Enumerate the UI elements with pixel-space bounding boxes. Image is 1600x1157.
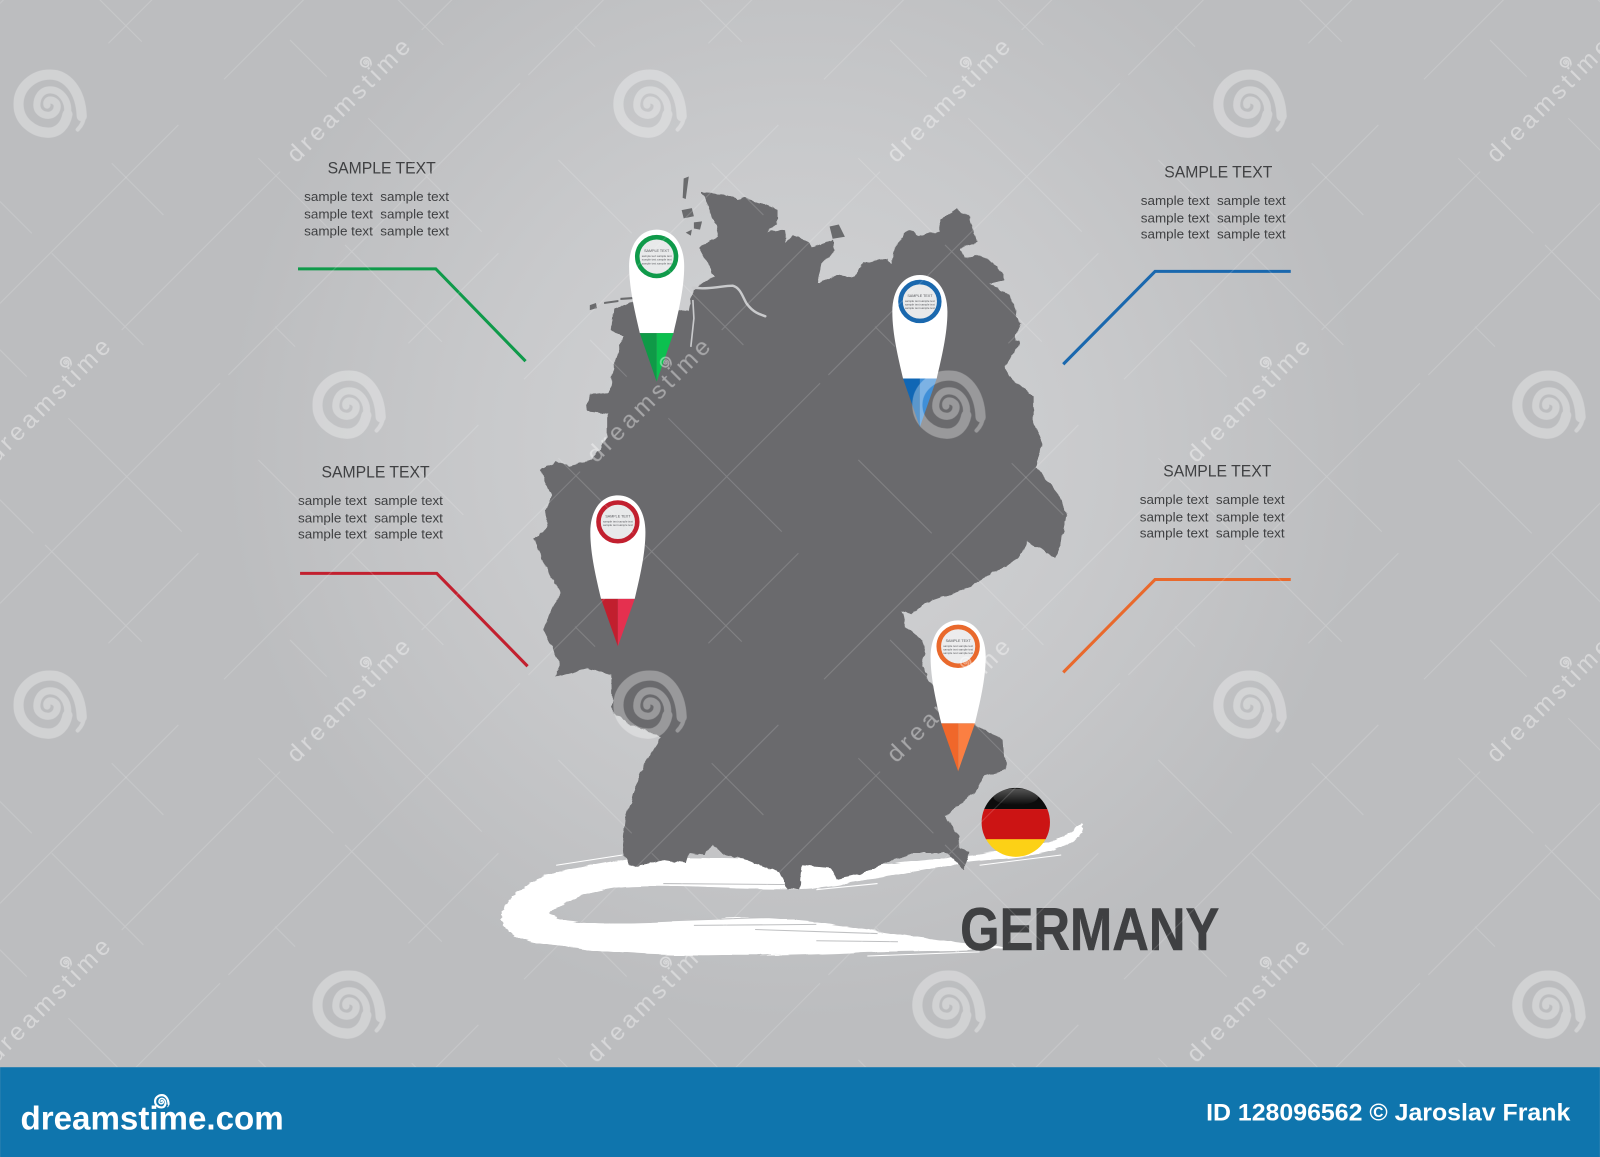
map pin: green: sample text sample text xyxy=(642,261,672,265)
East Frisian islands xyxy=(590,297,635,310)
text block: lower right: SAMPLE TEXT xyxy=(1163,461,1271,480)
map pin: orange: sample text sample text xyxy=(943,651,973,655)
small watermark spirals above wordmarks xyxy=(61,57,1571,967)
map pin: red: SAMPLE TEXT xyxy=(605,514,631,518)
map pin: green xyxy=(629,230,684,382)
footer logo spiral xyxy=(155,1095,169,1107)
text block: top right: sample text sample text xyxy=(1141,210,1286,225)
text block: top right: sample text sample text xyxy=(1141,193,1286,208)
map pin: blue: sample text sample text xyxy=(905,303,935,307)
text block: lower right xyxy=(1140,461,1285,541)
text block: lower left: sample text sample text xyxy=(298,493,443,508)
map pin: red: sample text sample text xyxy=(603,523,633,527)
river Weser inlet xyxy=(691,300,694,347)
watermark wordmarks: dreamstime xyxy=(582,933,716,1068)
text block: lower left: SAMPLE TEXT xyxy=(321,462,430,481)
map pin: orange: sample text sample text xyxy=(943,644,973,648)
footer logo wordmark: dreamstime.com xyxy=(21,1100,284,1137)
text block: top left: SAMPLE TEXT xyxy=(328,158,436,177)
watermark wordmarks: dreamstime xyxy=(282,34,416,168)
brush stroke swoosh xyxy=(501,822,1083,956)
watermark wordmarks: dreamstime xyxy=(1181,334,1316,468)
title: GERMANY: GERMANY xyxy=(960,896,1219,963)
Fehmarn island xyxy=(830,224,845,239)
icon: German flag badge xyxy=(982,788,1050,857)
map pin: green: sample text sample text xyxy=(642,258,672,262)
map pin: orange xyxy=(931,620,986,771)
connector line: orange xyxy=(1063,580,1291,672)
watermark wordmarks: dreamstime xyxy=(1181,933,1316,1068)
text block: lower right: sample text sample text xyxy=(1140,492,1285,507)
map of Germany xyxy=(534,177,1066,890)
North Frisian islands xyxy=(682,177,702,236)
text block: top right: sample text sample text xyxy=(1141,227,1286,242)
watermark wordmarks: dreamstime xyxy=(881,633,1016,768)
map pin: blue: sample text sample text xyxy=(905,299,935,303)
map pin: blue xyxy=(892,275,947,427)
connector line: green xyxy=(298,269,526,361)
map pin: red: sample text sample text xyxy=(603,519,633,523)
watermark wordmarks: dreamstime xyxy=(282,633,416,768)
map pin: blue: SAMPLE TEXT xyxy=(907,294,933,298)
text block: top left: sample text sample text xyxy=(304,224,449,239)
text block: top right xyxy=(1141,163,1286,242)
watermark wordmarks: dreamstime xyxy=(582,334,716,468)
connector line: red xyxy=(300,573,528,666)
text block: lower left: sample text sample text xyxy=(298,510,443,525)
text block: lower right: sample text sample text xyxy=(1140,526,1285,541)
text block: lower right: sample text sample text xyxy=(1140,509,1285,524)
text block: top right: SAMPLE TEXT xyxy=(1164,163,1272,182)
footer image credit: ID 128096562 © Jaroslav Frank xyxy=(1206,1099,1571,1126)
text block: top left: sample text sample text xyxy=(304,206,449,221)
map pin: orange: SAMPLE TEXT xyxy=(946,639,971,643)
connector line: blue xyxy=(1063,271,1291,364)
map pin: green: sample text sample text xyxy=(642,254,672,258)
map pin: orange: sample text sample text xyxy=(943,647,973,651)
text block: lower left xyxy=(298,462,443,542)
river Elbe inlet xyxy=(693,286,765,316)
text block: top left: sample text sample text xyxy=(304,189,449,204)
map pin: blue: sample text sample text xyxy=(905,306,935,310)
map pin: green: SAMPLE TEXT xyxy=(644,249,670,253)
map pin: red xyxy=(590,495,645,646)
text block: lower left: sample text sample text xyxy=(298,527,443,542)
footer banner xyxy=(0,1067,1600,1157)
text block: top left xyxy=(304,158,449,239)
watermark wordmarks: dreamstime xyxy=(881,34,1016,168)
